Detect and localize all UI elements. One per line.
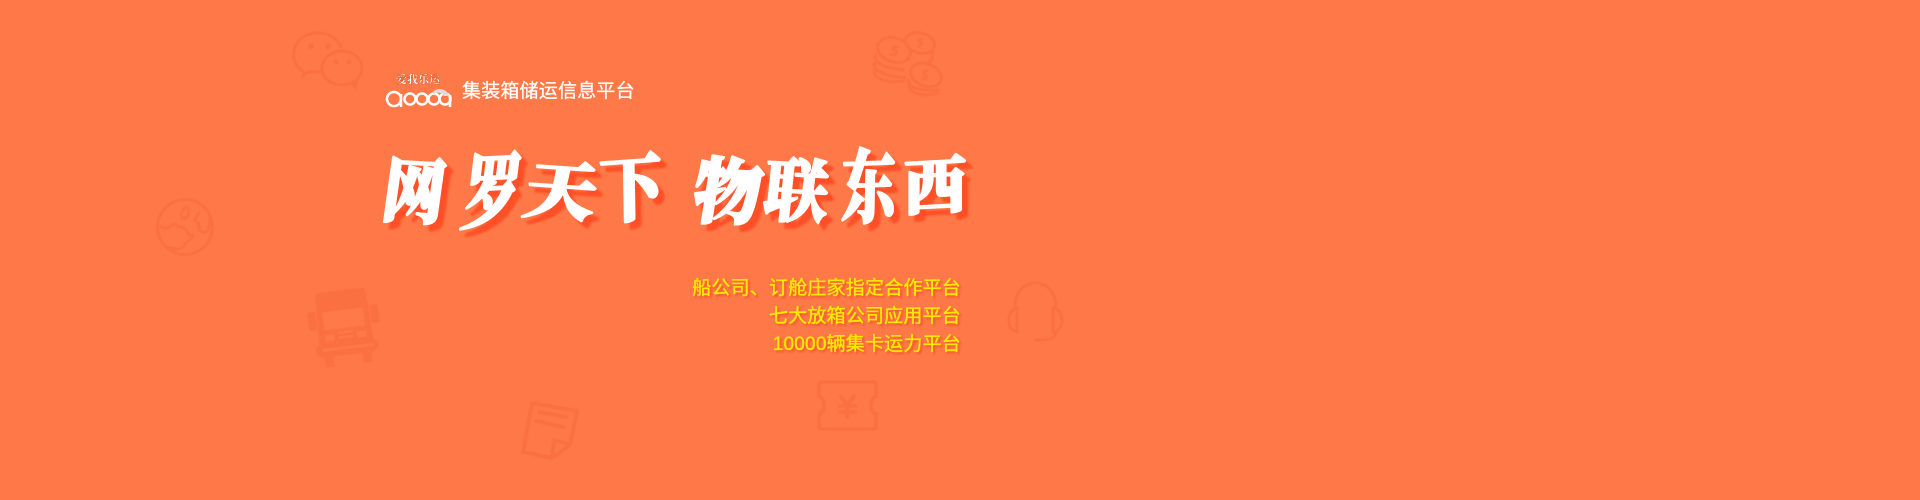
title white text: 西 [904,153,966,224]
title white text: 天 [519,155,603,230]
slogan shadows: 10000辆集卡运力平台 [775,335,963,357]
slogan shadows: 船公司、订舱庄家指定合作平台 [694,279,963,301]
slogan text: 七大放箱公司应用平台 [769,305,961,327]
title white text: 网 [378,154,450,234]
slogan text [692,277,961,355]
icon: ticket [819,382,876,429]
title white text: 罗 [458,148,526,240]
icon: headset [1009,283,1062,340]
title white text: 下 [599,148,666,233]
title white text: 联 [760,155,832,233]
icon: wechat [294,33,362,87]
slogan lines [692,277,963,357]
title shadow: 西 [910,159,972,230]
icon: document [523,403,577,458]
title white text: 物 [687,154,767,236]
title shadow: 联 [766,161,838,239]
title shadow [384,150,972,246]
icon: truck [305,286,384,369]
slogan shadows [694,279,963,357]
title shadow: 天 [525,161,609,236]
icon: coins [874,29,945,95]
title shadow: 下 [605,154,672,239]
logo wordmark: 爱我乐运 [395,72,441,86]
logo [387,72,450,107]
title [378,144,972,246]
title shadow: 网 [384,160,456,240]
title shadow: 罗 [464,154,532,246]
title white text: 东 [841,144,901,235]
slogan text: 船公司、订舱庄家指定合作平台 [692,277,961,299]
slogan shadows: 七大放箱公司应用平台 [771,307,963,329]
slogan text: 10000辆集卡运力平台 [773,333,961,355]
title shadow: 东 [847,150,907,241]
icon: globe [158,200,212,254]
title shadow: 物 [693,160,773,242]
title white text [378,144,966,240]
logo rings [387,92,450,107]
tagline: 集装箱储运信息平台 [462,80,635,102]
